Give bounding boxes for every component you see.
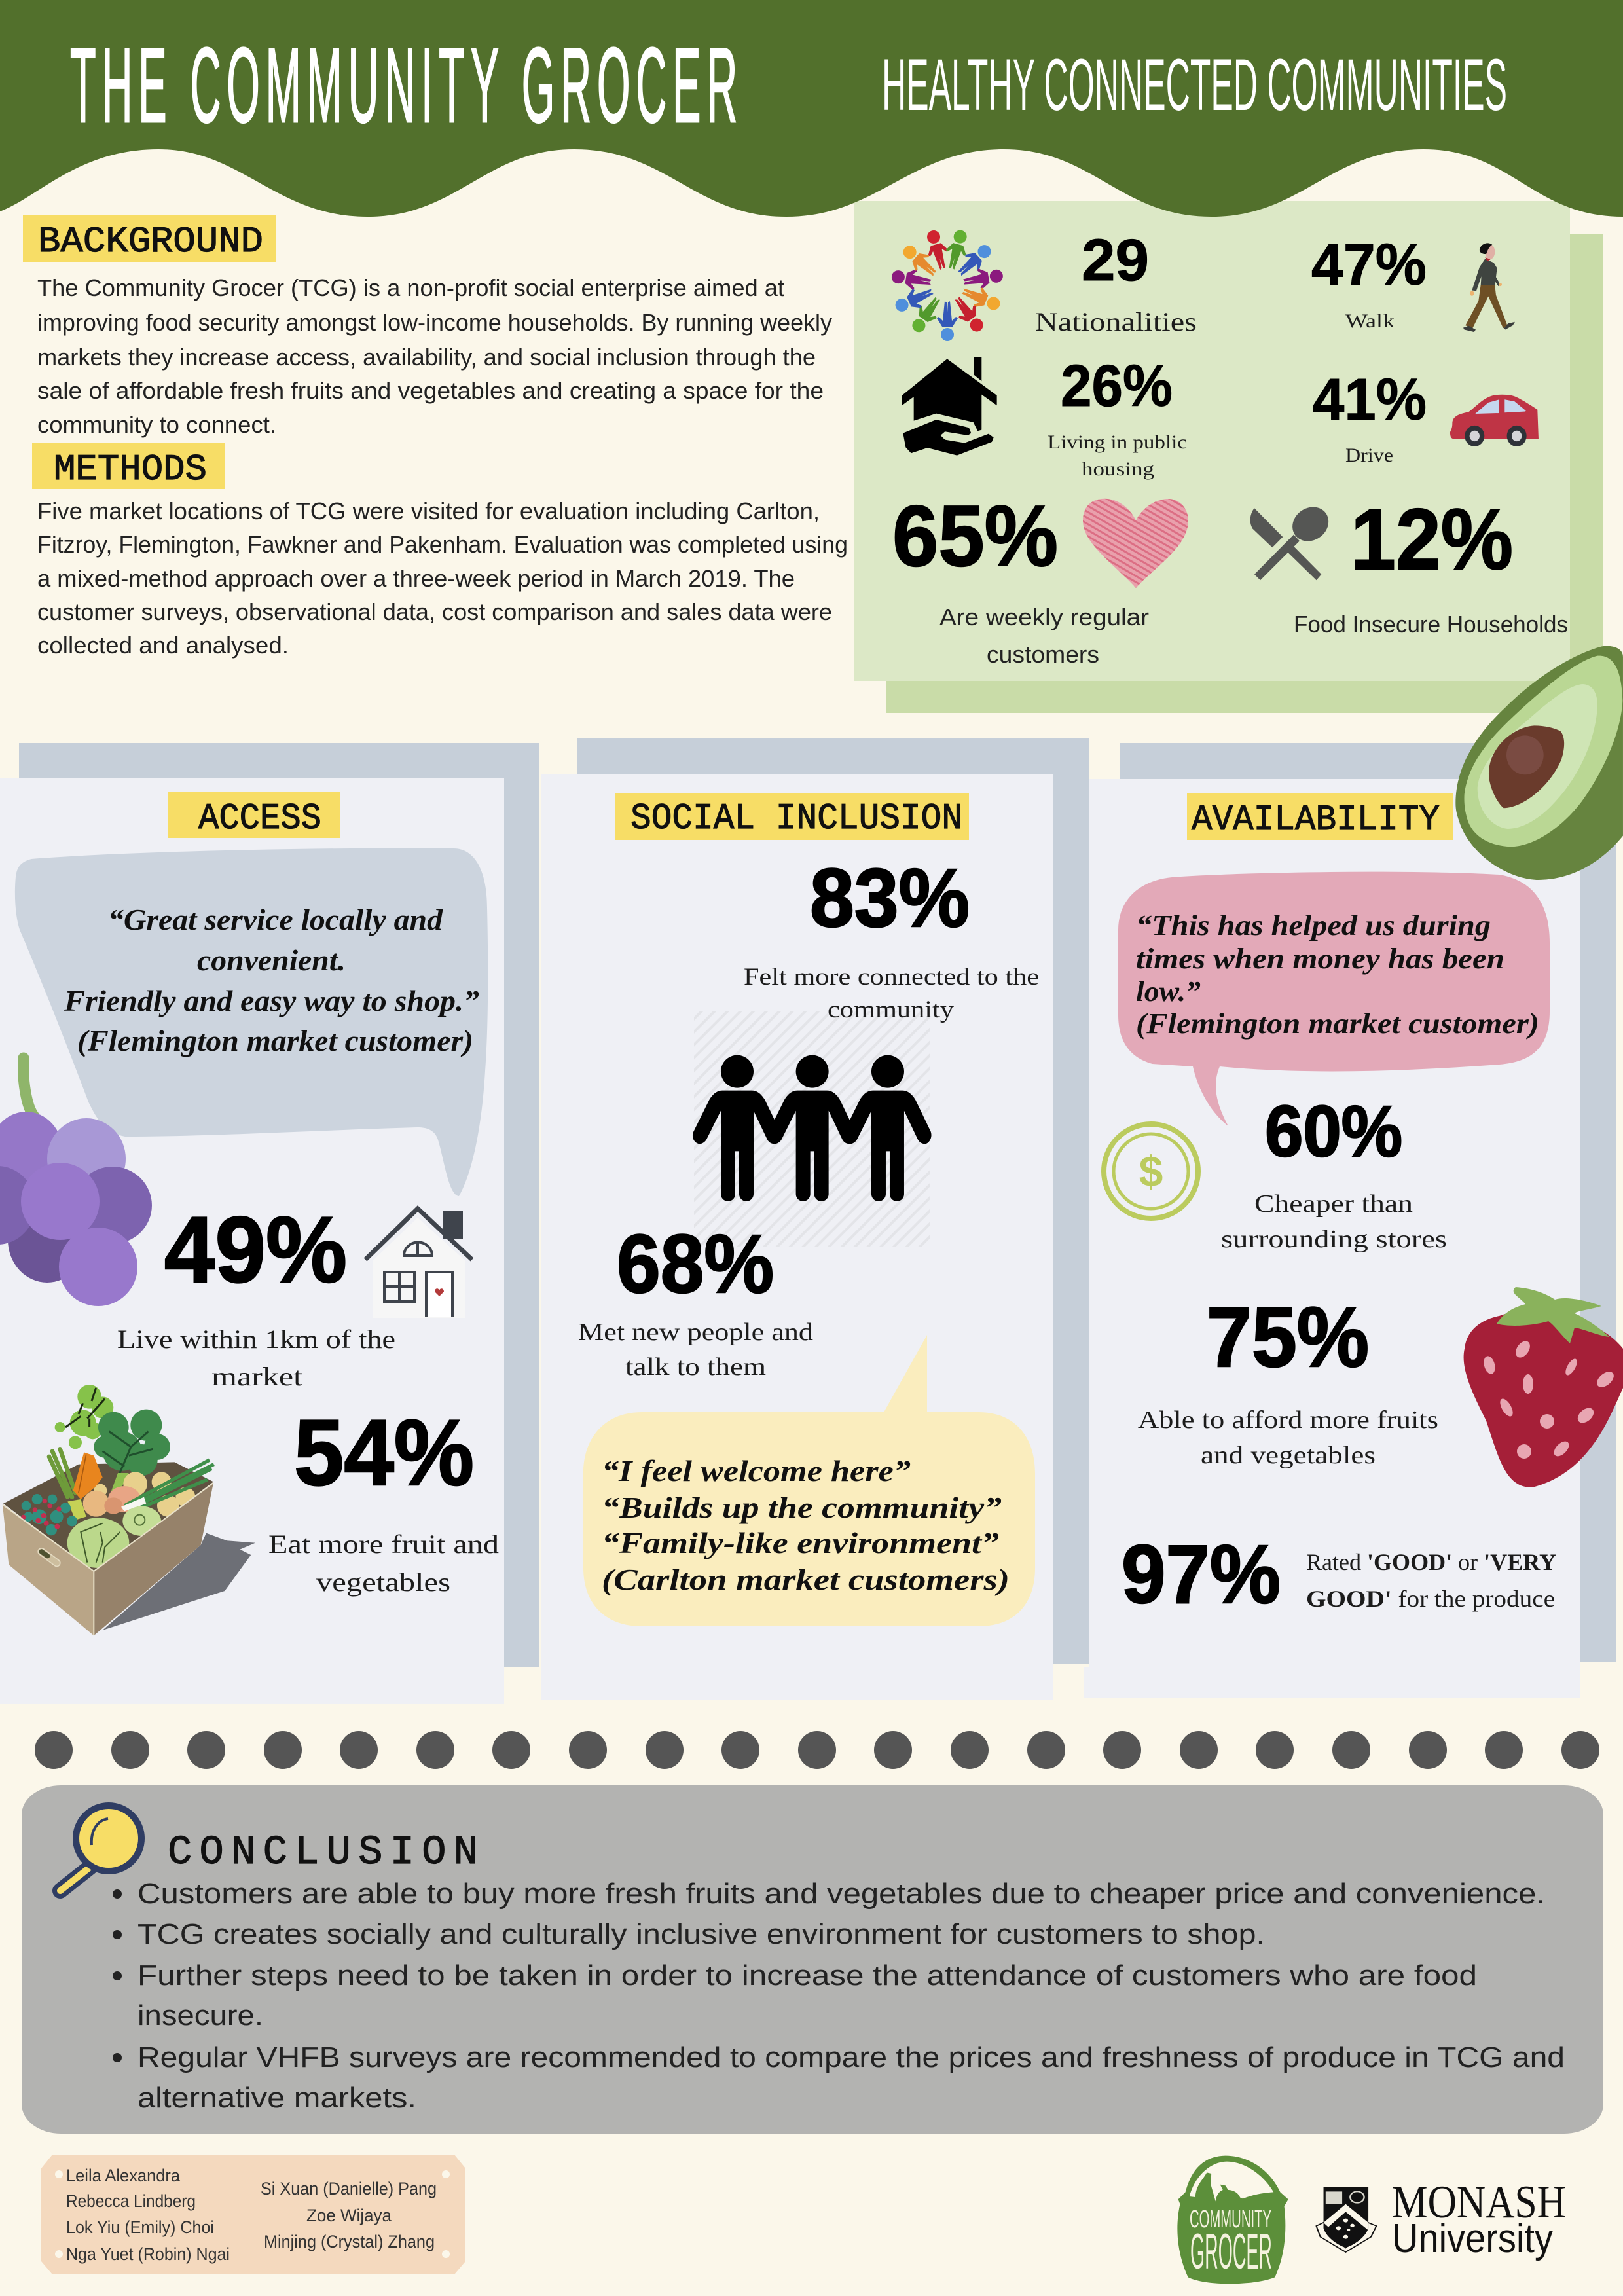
author names: right column (261, 2179, 437, 2251)
quote text: availability: “This has helped us during (1136, 909, 1491, 941)
quote text: access: (Flemington market customer) (77, 1024, 473, 1057)
icon: avocado (1455, 646, 1623, 880)
stat: 83% felt connected: Felt more connected to the (744, 964, 1039, 991)
icon: walking person (1463, 243, 1515, 332)
stat: 65% weekly regular customers: 65% (892, 488, 1058, 584)
icon: strawberry (1464, 1287, 1623, 1487)
heading: conclusion: CONCLUSION (168, 1829, 478, 1876)
stat: 26% public housing (1048, 354, 1187, 480)
stat: 75% afford more (1138, 1289, 1438, 1469)
stat: 47% walk (1311, 232, 1427, 332)
quote text: availability: (Flemington market customer) (1136, 1008, 1539, 1040)
stat: 47% walk: 47% (1311, 232, 1427, 298)
stat: 60% cheaper: Cheaper than (1254, 1190, 1413, 1218)
icon: magnifying glass (60, 1806, 141, 1891)
text block: background (37, 274, 832, 438)
logo: community grocer (1177, 2156, 1288, 2284)
quote text: social inclusion: (Carlton market customers) (602, 1563, 1010, 1596)
panel: authors (41, 2155, 465, 2274)
text block: methods: Fitzroy, Flemington, Fawkner and Pakenham. Evaluation was completed using (37, 531, 848, 558)
header banner (0, 0, 1623, 217)
text block: methods: Five market locations of TCG were visited for evaluation including Carlton, (37, 498, 820, 524)
bullet list: conclusions: Customers are able to buy more fresh fruits and vegetables due to cheaper price and convenience. (137, 1878, 1545, 1910)
stat: 26% public housing: Living in public (1048, 431, 1187, 453)
bullet list: conclusions: Regular VHFB surveys are recommended to compare the prices and freshness of produce in TCG and (137, 2041, 1565, 2073)
text block: background: sale of affordable fresh fruits and vegetables and creating a space for the (37, 377, 824, 404)
logo: monash university: MONASH (1392, 2177, 1566, 2228)
quote text: availability: times when money has been (1136, 943, 1504, 975)
stat: 54% eat more fruit: Eat more fruit and (268, 1529, 499, 1559)
panel: conclusion (22, 1785, 1603, 2134)
icon: grapes (0, 1058, 152, 1306)
text block: background: markets they increase access, availability, and social inclusion through the (37, 344, 816, 371)
quote text: availability (1136, 909, 1539, 1040)
heading: background: BACKGROUND (38, 221, 263, 263)
author names: left column: Lok Yiu (Emily) Choi (66, 2217, 214, 2237)
bullet list: conclusions: insecure. (137, 1999, 263, 2032)
stat: 54% eat more fruit (268, 1401, 499, 1597)
stat: 68% met new people: Met new people and (578, 1319, 813, 1346)
author names: left column: Rebecca Lindberg (66, 2191, 196, 2211)
author names: right column: Zoe Wijaya (306, 2206, 392, 2225)
stat: 12% food insecure: Food Insecure Households (1294, 611, 1568, 638)
icon: heart (1083, 499, 1188, 588)
text block: background: The Community Grocer (TCG) is a non-profit social enterprise aimed at (37, 274, 784, 301)
panel: social inclusion (541, 738, 1089, 1700)
panel: key statistics backing (886, 234, 1603, 713)
author names: right column: Si Xuan (Danielle) Pang (261, 2179, 437, 2198)
author names: left column: Nga Yuet (Robin) Ngai (66, 2244, 230, 2264)
stat: 83% felt connected: 83% (810, 852, 970, 944)
heading: availability: AVAILABILITY (1192, 799, 1440, 841)
icon: three people holding hands (693, 1011, 932, 1247)
panel: key statistics (854, 201, 1570, 681)
quote text: availability: low.” (1136, 975, 1201, 1008)
quote text: social inclusion (602, 1454, 1010, 1596)
stat: 97% rated good: 97% (1122, 1528, 1281, 1620)
bullet list: conclusions: TCG creates socially and culturally inclusive environment for customers to shop. (137, 1918, 1265, 1950)
stat: 12% food insecure (1294, 491, 1568, 638)
stat: 68% met new people: talk to them (625, 1353, 766, 1381)
stat: 29 nationalities (1035, 228, 1197, 337)
speech bubble: social inclusion quote (583, 1335, 1035, 1626)
stat: 41% drive: Drive (1345, 445, 1393, 466)
divider dots (35, 1731, 1599, 1769)
stat: 47% walk: Walk (1345, 310, 1395, 332)
author names: left column: Leila Alexandra (66, 2166, 181, 2185)
stat: 75% afford more: Able to afford more fruits (1138, 1406, 1438, 1434)
text block: background: community to connect. (37, 411, 276, 438)
stat: 26% public housing: 26% (1061, 354, 1173, 419)
text block: methods: collected and analysed. (37, 632, 289, 659)
stat: 49% within 1km: 49% (164, 1198, 347, 1302)
stat: 54% eat more fruit: vegetables (316, 1567, 450, 1597)
stat: 54% eat more fruit: 54% (294, 1401, 474, 1505)
bullet list: conclusions (113, 1878, 1565, 2114)
quote text: social inclusion: “I feel welcome here” (602, 1454, 911, 1487)
heading: methods: METHODS (54, 448, 207, 490)
heading: access (168, 792, 340, 839)
stat: 49% within 1km (117, 1198, 395, 1391)
stat: 65% weekly regular customers (892, 488, 1149, 668)
quote text: access: convenient. (197, 943, 346, 977)
heading: access: ACCESS (198, 797, 321, 839)
stat: 83% felt connected (744, 852, 1039, 1023)
quote text: social inclusion: “Builds up the community” (602, 1491, 1002, 1524)
logo: community grocer: COMMUNITY (1190, 2206, 1271, 2233)
text block: background: improving food security amongst low-income households. By running weekly (37, 309, 832, 336)
text block: methods: customer surveys, observational data, cost comparison and sales data were (37, 598, 832, 625)
bullet list: conclusions: Further steps need to be taken in order to increase the attendance of customers who are food (137, 1959, 1477, 1992)
stat: 83% felt connected: community (828, 996, 955, 1023)
speech bubble: access quote (15, 848, 488, 1196)
author names: right column: Minjing (Crystal) Zhang (264, 2232, 435, 2251)
stat: 75% afford more: 75% (1207, 1289, 1369, 1385)
quote text: access (64, 903, 479, 1057)
stat: 97% rated good (1122, 1528, 1556, 1620)
stat: 26% public housing: housing (1082, 458, 1154, 480)
quote text: access: “Great service locally and (108, 903, 443, 936)
icon: vegetable box (3, 1385, 255, 1635)
panel: access (0, 743, 539, 1704)
icon: car (1450, 395, 1539, 446)
quote text: social inclusion: “Family-like environment” (602, 1526, 999, 1559)
logo: monash university: University (1392, 2216, 1553, 2261)
icon: dollar coin: $ (1139, 1147, 1163, 1195)
text block: methods (37, 498, 848, 659)
stat: 29 nationalities: 29 (1082, 228, 1149, 293)
bullet list: conclusions: alternative markets. (137, 2082, 416, 2114)
author names: left column (66, 2166, 230, 2264)
icon: dollar coin (1104, 1124, 1198, 1218)
stat: 65% weekly regular customers: customers (987, 641, 1099, 668)
text: GROCER (1190, 2224, 1272, 2280)
stat: 41% drive: 41% (1313, 367, 1427, 433)
stat: 68% met new people (578, 1218, 813, 1381)
heading: social inclusion: SOCIAL INCLUSION (630, 797, 962, 839)
title: THE COMMUNITY GROCER (70, 26, 737, 145)
quote text: access: Friendly and easy way to shop.” (64, 984, 479, 1017)
speech bubble: availability quote (1118, 872, 1550, 1126)
stat: 60% cheaper: 60% (1265, 1091, 1402, 1172)
stat: 68% met new people: 68% (617, 1218, 774, 1310)
stat: 29 nationalities: Nationalities (1035, 307, 1197, 337)
stat: 65% weekly regular customers: Are weekly regular (939, 604, 1149, 630)
text block: methods: a mixed-method approach over a three-week period in March 2019. The (37, 565, 795, 592)
stat: 60% cheaper (1221, 1091, 1447, 1253)
stat: 60% cheaper: surrounding stores (1221, 1226, 1447, 1253)
stat: 75% afford more: and vegetables (1201, 1442, 1376, 1469)
icon: house (365, 1209, 472, 1318)
stat: 97% rated good: GOOD' for the produce (1306, 1586, 1555, 1612)
stat: 41% drive (1313, 367, 1427, 466)
icon: circle of people (890, 228, 1004, 341)
stat: 49% within 1km: market (211, 1362, 302, 1391)
logo: monash university (1317, 2177, 1566, 2261)
stat: 12% food insecure: 12% (1351, 491, 1513, 587)
icon: house in hand (902, 357, 997, 456)
icon: knife and spoon (1250, 501, 1334, 580)
panel: availability (1084, 743, 1623, 1698)
stat: 49% within 1km: Live within 1km of the (117, 1324, 395, 1354)
stat: 97% rated good: Rated 'GOOD' or 'VERY (1306, 1549, 1556, 1575)
